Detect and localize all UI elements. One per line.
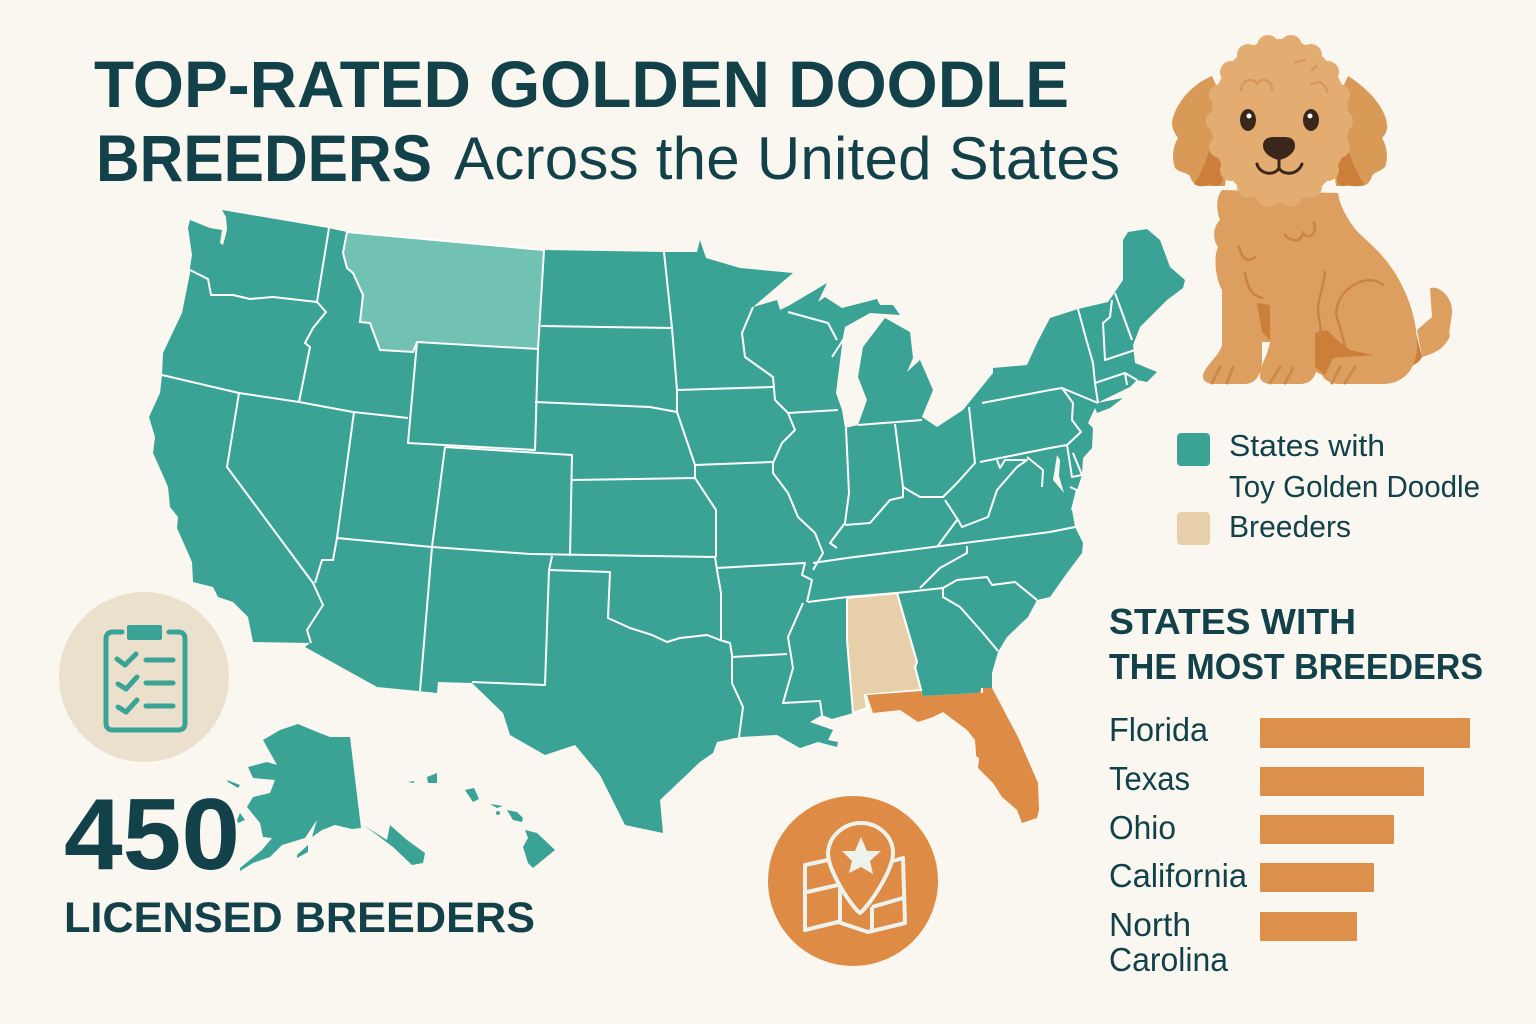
legend: Breeders (1229, 509, 1351, 544)
tampa bay (974, 755, 979, 768)
state: montana (343, 232, 544, 352)
title: Across the United States (454, 125, 1120, 192)
state mass (149, 210, 1185, 833)
right ear (1328, 76, 1387, 186)
heading: states with the most breeders: STATES WITH (1109, 601, 1356, 642)
title: BREEDERS (96, 121, 432, 195)
heading: states with the most breeders (1109, 601, 1483, 687)
bar chart: Carolina (1109, 941, 1229, 978)
bar chart: California (1109, 857, 1248, 894)
bar chart: Florida (1109, 711, 1209, 748)
left ear (1172, 76, 1232, 186)
paw toe marks (1212, 367, 1355, 383)
title (94, 47, 1120, 195)
eyes (1240, 109, 1319, 131)
map: contiguous United States (149, 210, 1185, 833)
legend: Toy Golden Doodle (1229, 469, 1480, 504)
legend (1177, 428, 1480, 545)
stat: 450 licensed breeders: 450 (64, 779, 240, 891)
map: hawaii (408, 773, 555, 868)
bar chart: Ohio (1109, 809, 1176, 846)
dog illustration (1172, 35, 1452, 384)
head fur (1206, 35, 1353, 207)
stat: 450 licensed breeders (64, 779, 535, 942)
body (1203, 190, 1417, 384)
tail (1417, 288, 1452, 357)
state borders (162, 228, 1137, 737)
head fur marks (1241, 60, 1327, 92)
icon: clipboard checklist (59, 592, 229, 762)
title: TOP-RATED GOLDEN DOODLE (94, 47, 1069, 121)
nose and mouth (1257, 137, 1302, 173)
state: florida (867, 688, 1039, 823)
icon: map with star pin (768, 796, 938, 966)
heading: states with the most breeders: THE MOST BREEDERS (1109, 646, 1483, 687)
bar chart: Texas (1109, 760, 1190, 797)
bar chart: North (1109, 906, 1191, 943)
body shading (1315, 330, 1373, 375)
map: alaska (227, 724, 425, 871)
legend: States with (1229, 428, 1385, 463)
chesapeake bay (1053, 455, 1064, 493)
stat: 450 licensed breeders: LICENSED BREEDERS (64, 894, 535, 942)
state: alabama (847, 593, 921, 713)
bar chart (1109, 711, 1470, 978)
